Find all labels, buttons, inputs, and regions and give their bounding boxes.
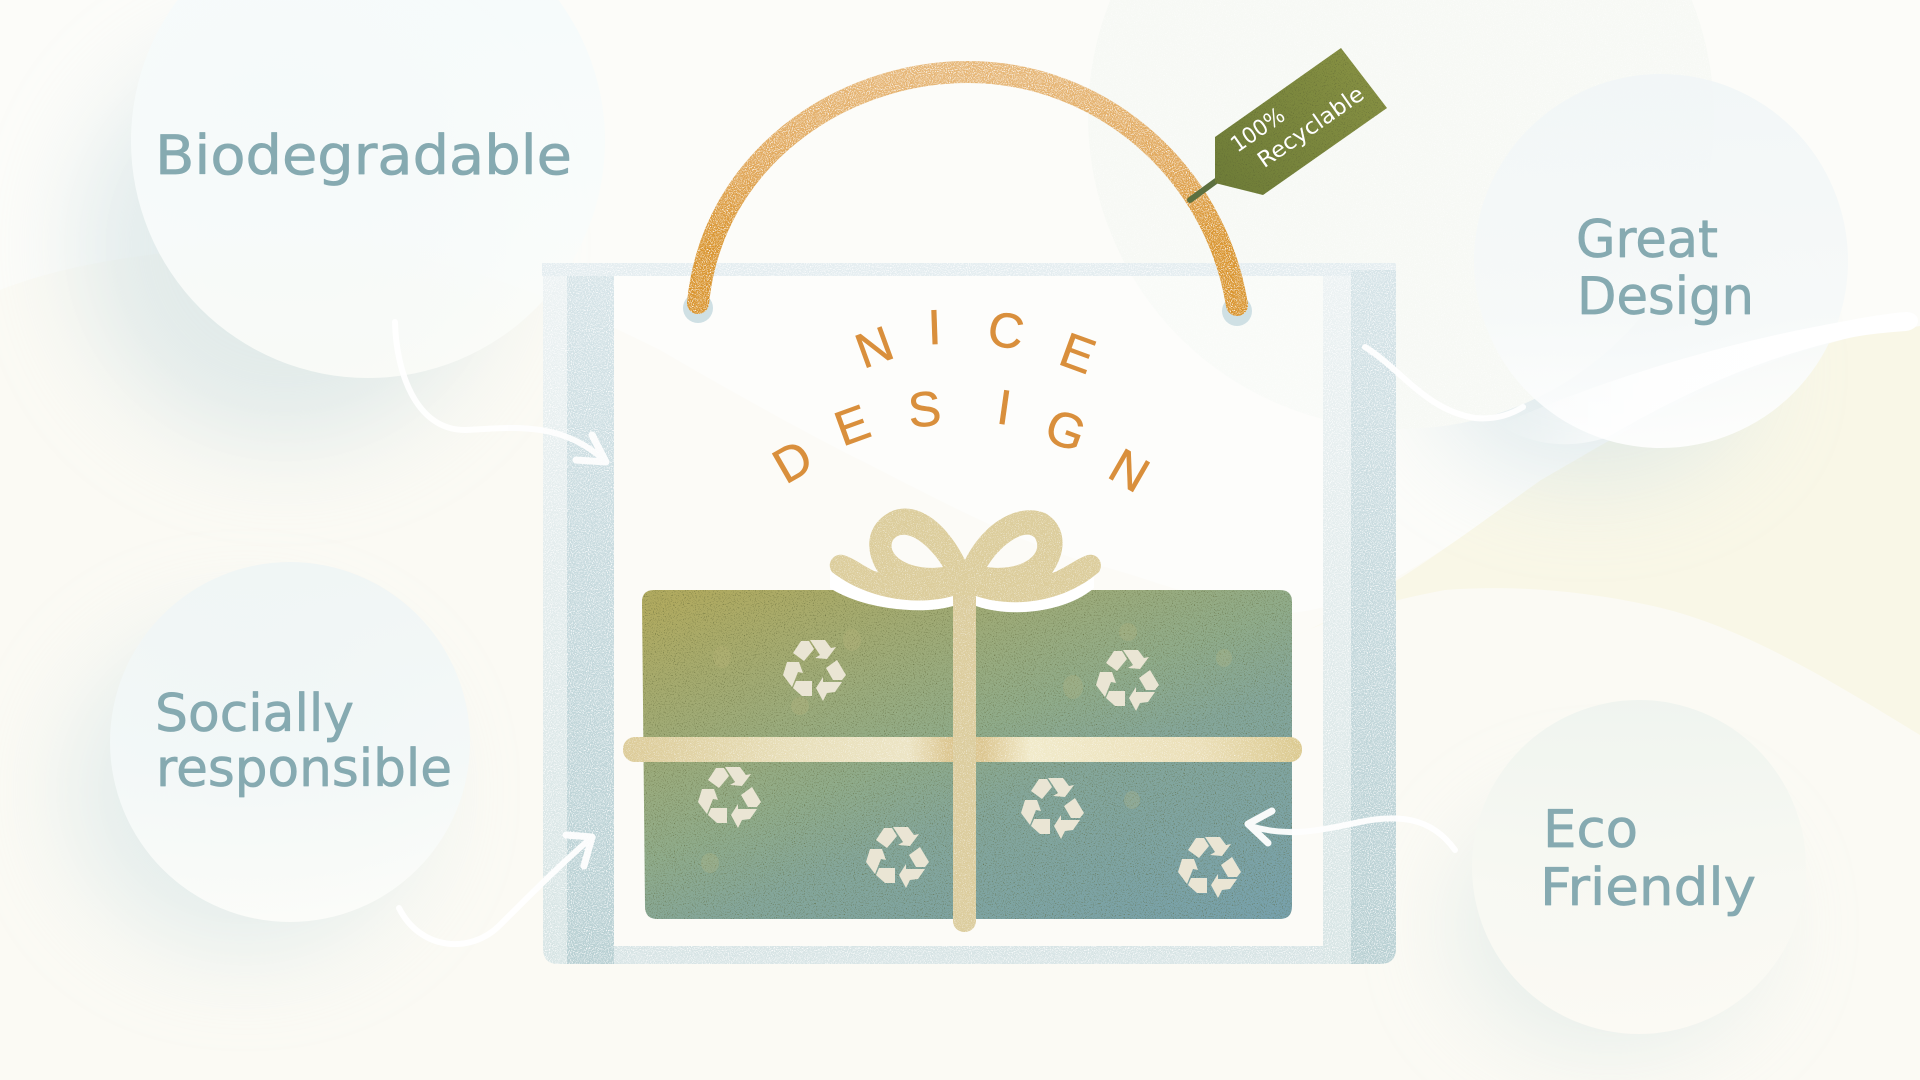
box body bbox=[642, 590, 1292, 919]
white notch under bow bbox=[830, 570, 1094, 612]
circle: biodegradable backdrop bbox=[131, 0, 605, 378]
tag body bbox=[1215, 48, 1387, 195]
circle: socially responsible backdrop bbox=[110, 562, 470, 922]
word: nice: N bbox=[849, 317, 900, 379]
circle: great design backdrop bbox=[1474, 74, 1848, 448]
label: eco friendly bbox=[1540, 800, 1756, 918]
recycle icon 6 bbox=[1178, 837, 1241, 898]
soft shadow right bottom bbox=[1460, 805, 1760, 1045]
word: nice bbox=[849, 301, 1102, 385]
hang tag: 100% recyclable bbox=[1190, 48, 1387, 200]
white ribbon wave bbox=[1500, 312, 1918, 444]
tag string bbox=[1190, 181, 1216, 200]
faint dots on wrapping bbox=[701, 623, 1232, 873]
arrow: eco friendly to box bbox=[1248, 811, 1455, 850]
word: design: N bbox=[1100, 439, 1158, 503]
word: nice: I bbox=[927, 301, 942, 355]
word: design: G bbox=[1038, 399, 1093, 463]
word: design bbox=[764, 380, 1158, 503]
bag right side bbox=[1323, 270, 1396, 964]
vertical ribbon bbox=[953, 566, 976, 932]
gift box bbox=[623, 509, 1302, 932]
recycle icon 4 bbox=[866, 827, 929, 888]
bag top edge bbox=[542, 263, 1396, 276]
label: eco friendly: Friendly bbox=[1540, 858, 1756, 918]
label: socially responsible: Socially bbox=[155, 684, 354, 744]
word: design: D bbox=[764, 430, 822, 494]
bow bbox=[830, 509, 1101, 602]
bag handle bbox=[698, 72, 1237, 305]
soft shadow left top bbox=[80, 45, 490, 445]
shopping bag bbox=[542, 263, 1396, 964]
tag text: Recyclable bbox=[1253, 82, 1369, 173]
arrow: socially responsible to bag bbox=[399, 835, 592, 944]
label: biodegradable: Biodegradable bbox=[155, 124, 572, 187]
label: great design: Design bbox=[1577, 267, 1754, 327]
eyelet right bbox=[1222, 296, 1252, 326]
label: great design bbox=[1576, 210, 1754, 327]
label: socially responsible: responsible bbox=[156, 739, 452, 799]
circle: eco friendly backdrop bbox=[1472, 700, 1806, 1034]
label: eco friendly: Eco bbox=[1543, 800, 1638, 860]
arrow: great design to bag bbox=[1365, 347, 1523, 418]
yellow band on right bbox=[1292, 326, 1920, 735]
soft shadow left bottom bbox=[70, 630, 420, 950]
soft shadow right top bbox=[1430, 260, 1750, 480]
recycle icon 1 bbox=[783, 640, 846, 701]
arched heading: nice design bbox=[764, 301, 1158, 503]
cream wave bbox=[0, 247, 1920, 1080]
horizontal ribbon bbox=[623, 737, 1302, 762]
label: great design: Great bbox=[1576, 210, 1718, 270]
word: design: E bbox=[828, 395, 877, 457]
recycle icon 2 bbox=[1096, 650, 1159, 711]
eyelet left bbox=[683, 293, 713, 323]
bag interior bbox=[612, 270, 1324, 950]
bag bottom edge bbox=[614, 946, 1323, 964]
tag text: 100% bbox=[1226, 103, 1290, 158]
tag text bbox=[1226, 59, 1369, 181]
circle: large grainy backdrop bbox=[1088, 0, 1714, 429]
word: design: I bbox=[994, 380, 1015, 436]
bag left side bbox=[543, 276, 614, 964]
recycle icon 5 bbox=[1021, 778, 1084, 839]
label: socially responsible bbox=[155, 684, 452, 799]
word: nice: C bbox=[984, 302, 1028, 361]
arrow: biodegradable to bag bbox=[395, 322, 606, 462]
word: design: S bbox=[906, 382, 943, 438]
recycle icon 3 bbox=[698, 767, 761, 828]
word: nice: E bbox=[1053, 323, 1102, 385]
